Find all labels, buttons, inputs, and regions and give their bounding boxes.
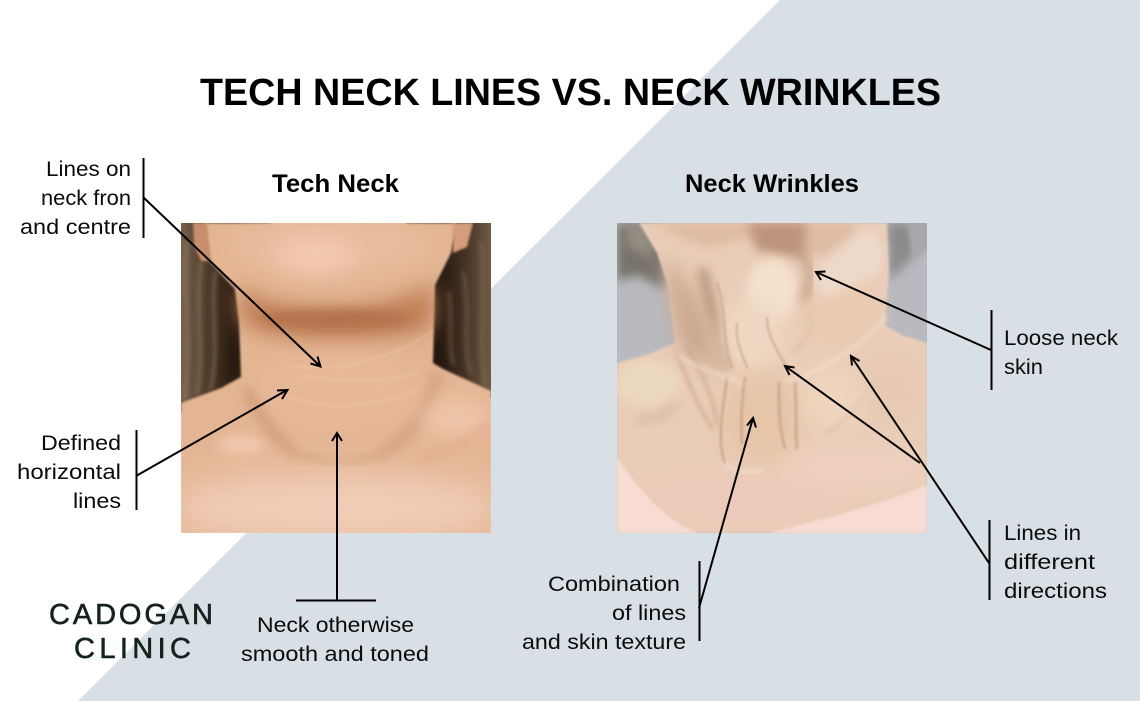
callout: defined horizontal lines: lines <box>73 489 121 513</box>
callout: defined horizontal lines: Defined <box>41 431 121 455</box>
callout: neck otherwise smooth and toned: smooth and toned <box>241 642 429 666</box>
title: TECH NECK LINES VS. NECK WRINKLES <box>200 72 941 114</box>
skin shading <box>181 223 491 533</box>
callout: lines in different directions: Lines in <box>1004 521 1081 545</box>
heading: tech neck: Tech Neck <box>272 170 399 198</box>
callout: lines in different directions: directions <box>1004 579 1107 603</box>
photo: tech neck <box>181 223 491 533</box>
callout: combination of lines and skin texture: and skin texture <box>522 630 686 654</box>
callout: lines in different directions <box>785 356 1107 603</box>
callout: defined horizontal lines <box>17 390 288 513</box>
callout: neck otherwise smooth and toned: Neck otherwise <box>257 613 414 637</box>
callout: combination of lines and skin texture: Combination <box>548 572 680 596</box>
callout: lines on neck front and centre: Lines on <box>46 157 131 181</box>
callout: loose neck skin <box>816 272 1118 390</box>
heading: neck wrinkles: Neck Wrinkles <box>685 170 859 198</box>
pink top <box>617 458 927 533</box>
logo: Cadogan Clinic: CADOGAN <box>49 599 213 631</box>
logo: Cadogan Clinic: CLINIC <box>74 633 191 665</box>
callout: loose neck skin: Loose neck <box>1004 326 1118 350</box>
callout: lines in different directions: different <box>1004 550 1095 574</box>
neck creases <box>388 330 434 354</box>
callout: lines on neck front and centre: and centre <box>20 215 131 239</box>
wrinkles <box>677 283 885 472</box>
photo: neck wrinkles <box>615 223 927 533</box>
logo: Cadogan Clinic <box>49 599 213 665</box>
callout: lines on neck front and centre <box>20 157 320 366</box>
skin shading <box>617 223 884 464</box>
callout: combination of lines and skin texture <box>522 418 756 654</box>
callout: combination of lines and skin texture: of lines <box>612 601 686 625</box>
callout: neck otherwise smooth and toned <box>241 433 429 666</box>
callout: lines on neck front and centre: neck fron <box>41 186 131 210</box>
callout: loose neck skin: skin <box>1004 355 1043 379</box>
callout: defined horizontal lines: horizontal <box>17 460 121 484</box>
